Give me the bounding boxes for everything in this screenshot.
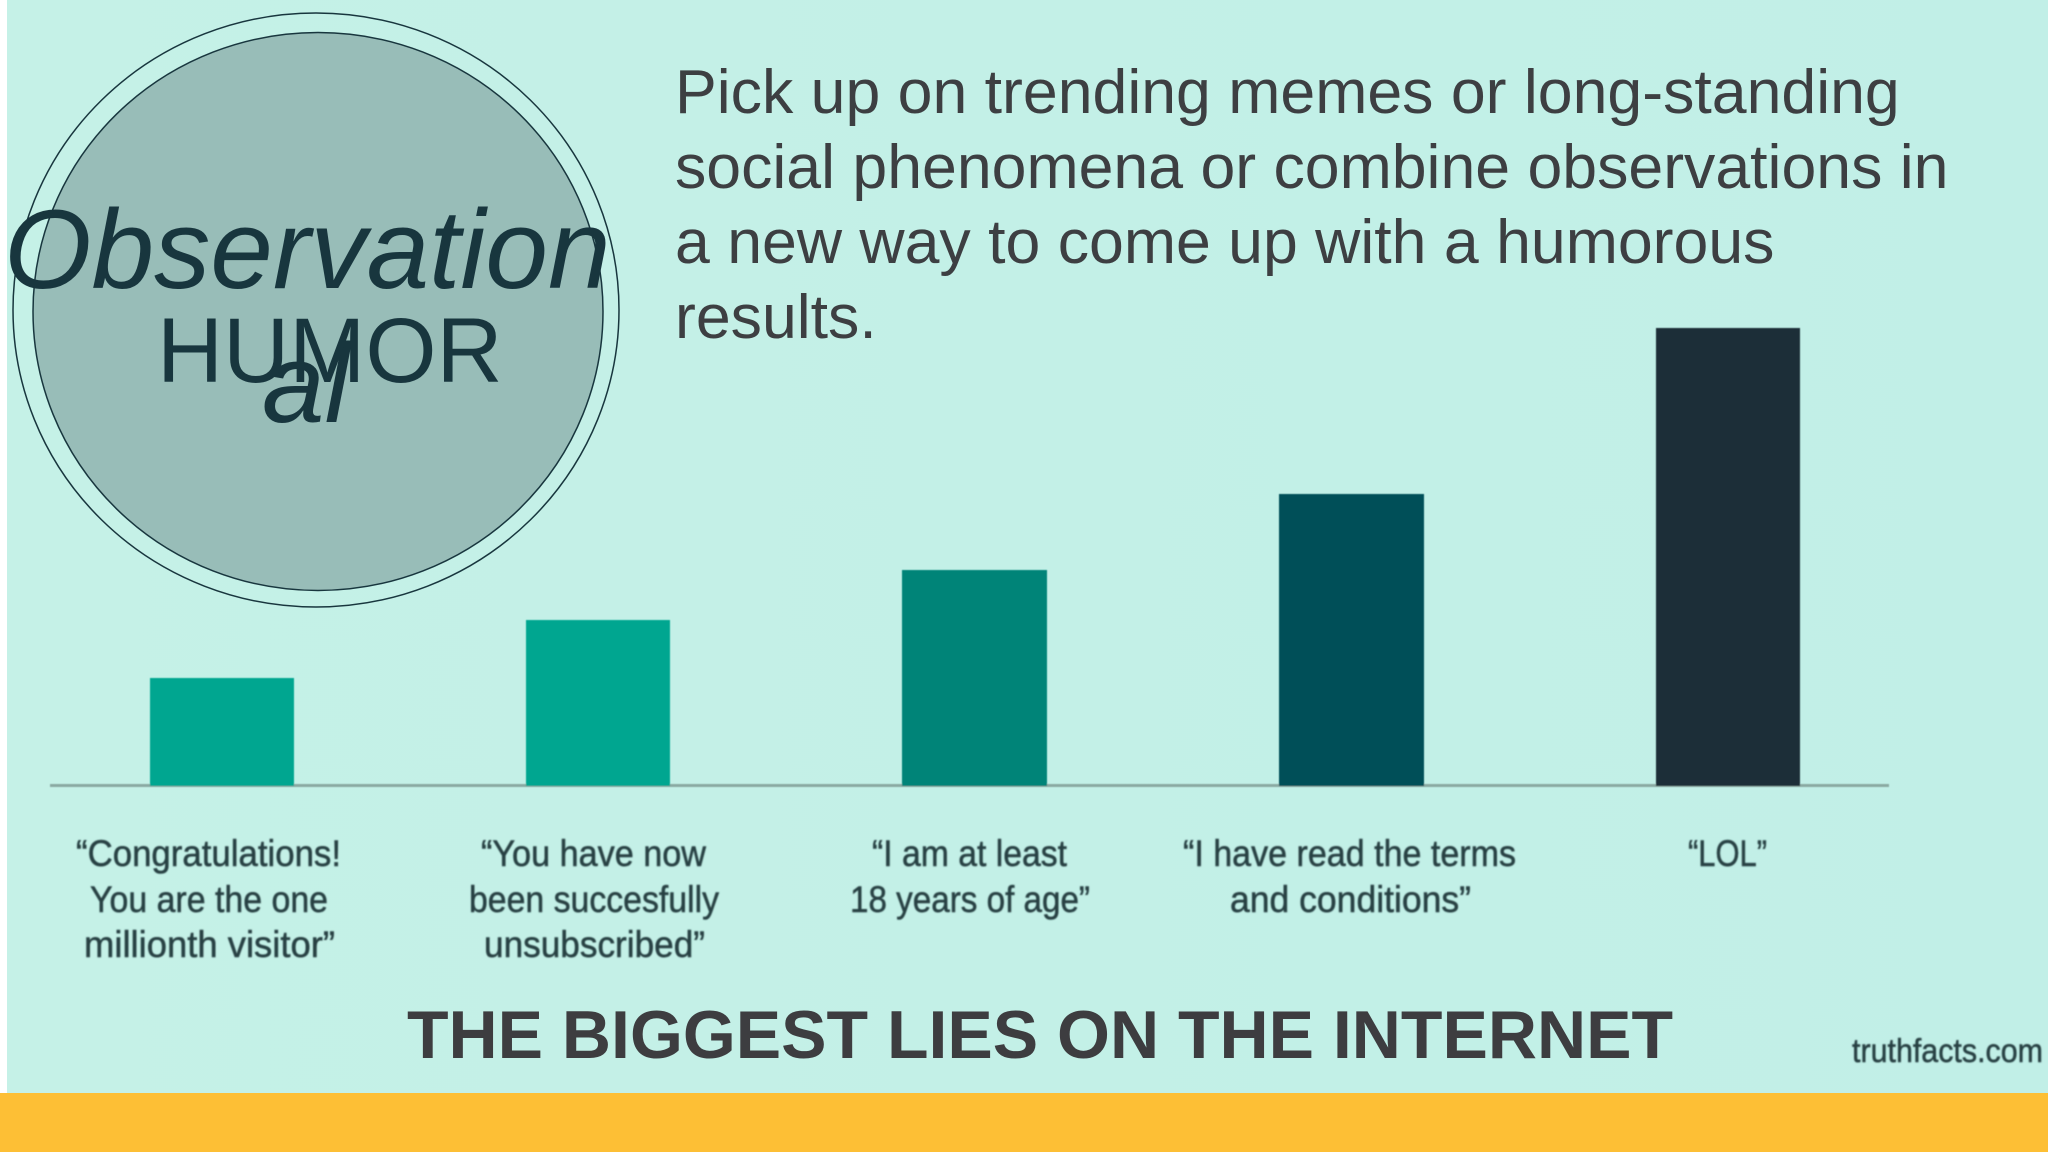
circle badge — [4, 13, 619, 607]
heading: HUMOR: HUMOR — [157, 300, 503, 402]
bar captions: and conditions” — [1230, 879, 1471, 920]
bar captions: unsubscribed” — [484, 924, 705, 965]
bar chart — [50, 328, 1889, 787]
bar captions: millionth visitor” — [84, 924, 335, 965]
description paragraph: results. — [675, 282, 877, 352]
bar captions — [76, 833, 2043, 1069]
bar captions: You are the one — [90, 879, 328, 920]
description paragraph: social phenomena or combine observations in — [675, 132, 1948, 202]
heading: Observational: Observation — [4, 186, 611, 312]
description paragraph: Pick up on trending memes or long-standing — [675, 57, 1900, 127]
heading: Observational: al — [262, 320, 353, 446]
bar 1: Congratulations — [150, 678, 294, 786]
left white strip — [0, 0, 7, 1093]
caption 4: “I have read the terms — [1183, 833, 1516, 874]
outer ring — [13, 13, 619, 607]
bar 2: unsubscribed — [526, 620, 670, 786]
description paragraph: a new way to come up with a humorous — [675, 207, 1774, 277]
caption 2: “You have now — [481, 833, 706, 874]
axis line — [50, 784, 1889, 787]
caption 5: “LOL” — [1688, 833, 1767, 874]
inner disc — [33, 32, 603, 590]
bar captions: 18 years of age” — [850, 879, 1090, 920]
bar captions: been succesfully — [469, 879, 719, 920]
bar 3: 18 years of age — [902, 570, 1047, 786]
caption 3: “I am at least — [872, 833, 1068, 874]
chart title: THE BIGGEST LIES ON THE INTERNET — [407, 997, 1673, 1073]
caption 1: “Congratulations! — [76, 833, 341, 874]
bar 4: terms and conditions — [1279, 494, 1424, 786]
bottom orange band — [0, 1093, 2048, 1152]
bar 5: LOL — [1656, 328, 1800, 786]
